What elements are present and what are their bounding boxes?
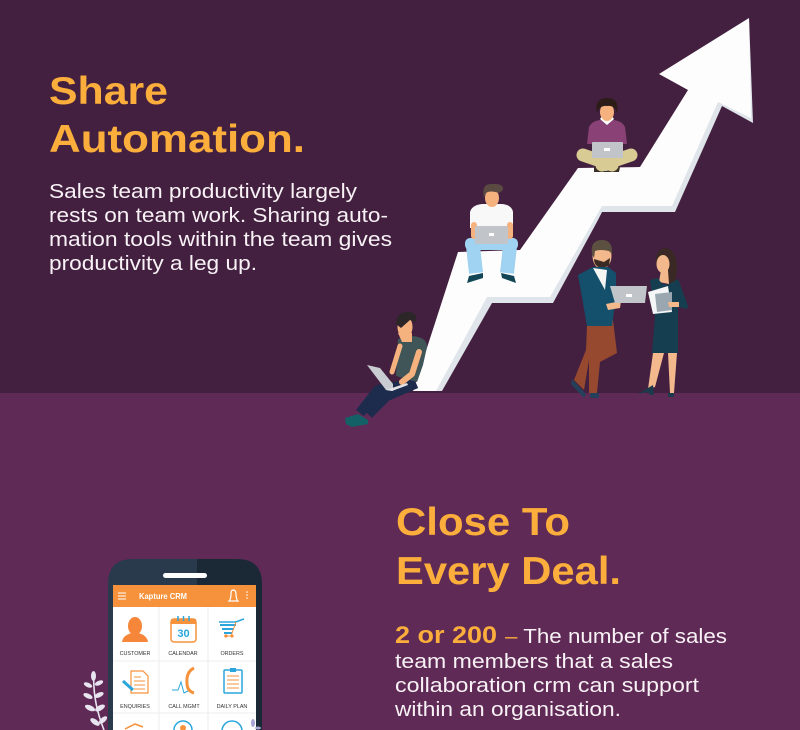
text block: share automation description: mation tools within the team gives bbox=[49, 228, 392, 251]
icon: daily plan: DAILY PLAN bbox=[217, 704, 247, 710]
heading: share automation bbox=[49, 70, 305, 161]
text block: share automation description: rests on team work. Sharing auto- bbox=[49, 204, 388, 227]
icon: calendar: CALENDAR bbox=[168, 651, 198, 657]
icon: daily plan bbox=[217, 668, 247, 710]
icon: calendar: 30 bbox=[177, 628, 190, 640]
figure: man sitting at base of arrow with laptop bbox=[345, 312, 427, 427]
icon: call management: CALL MGMT bbox=[168, 704, 200, 710]
text block: close to every deal description: within an organisation. bbox=[394, 698, 621, 721]
figure: man sitting cross-legged on top step bbox=[583, 98, 631, 172]
icon: decorative plant left of phone bbox=[82, 671, 108, 730]
figure: bearded man in blue jacket bbox=[571, 240, 621, 398]
text block: close to every deal description: – The number of sales bbox=[505, 625, 727, 648]
arrow: rising white arrow bbox=[413, 18, 753, 391]
figure: woman with papers and tablet bbox=[610, 248, 688, 397]
text block: close to every deal description: collaboration crm can support bbox=[395, 674, 699, 697]
icon: plant leaves right of phone bbox=[251, 719, 261, 730]
heading: share automation: Share bbox=[49, 70, 168, 113]
icon: enquiries bbox=[120, 671, 150, 710]
text block: share automation description: Sales team productivity largely bbox=[49, 180, 358, 203]
heading: share automation: Automation. bbox=[49, 118, 305, 161]
icon: orders cart: ORDERS bbox=[220, 651, 244, 657]
icon: customer bbox=[120, 617, 150, 657]
text block: close to every deal description: 2 or 200 bbox=[395, 622, 497, 649]
icon: customer: CUSTOMER bbox=[120, 651, 150, 657]
icon: partial lower row bbox=[125, 721, 242, 730]
icon: call management bbox=[168, 668, 200, 710]
panel: close to every deal background bbox=[0, 393, 800, 730]
panel: share automation background bbox=[0, 0, 800, 393]
heading: close to every deal: Close To bbox=[396, 501, 570, 544]
phone app header bbox=[113, 585, 256, 607]
heading: close to every deal bbox=[396, 501, 621, 593]
icon: enquiries: ENQUIRIES bbox=[120, 704, 150, 710]
phone app icon grid bbox=[113, 607, 256, 730]
phone mockup bbox=[108, 559, 262, 730]
text block: share automation description bbox=[49, 180, 392, 275]
heading: close to every deal: Every Deal. bbox=[396, 550, 621, 593]
text block: close to every deal description bbox=[394, 622, 727, 721]
phone app header: Kapture CRM bbox=[139, 591, 187, 601]
figure: man sitting on middle step bbox=[465, 184, 518, 283]
text block: share automation description: productivity a leg up. bbox=[49, 252, 257, 275]
icon: calendar bbox=[168, 616, 198, 657]
icon: orders cart bbox=[219, 619, 244, 657]
text block: close to every deal description: team members that a sales bbox=[395, 650, 673, 673]
